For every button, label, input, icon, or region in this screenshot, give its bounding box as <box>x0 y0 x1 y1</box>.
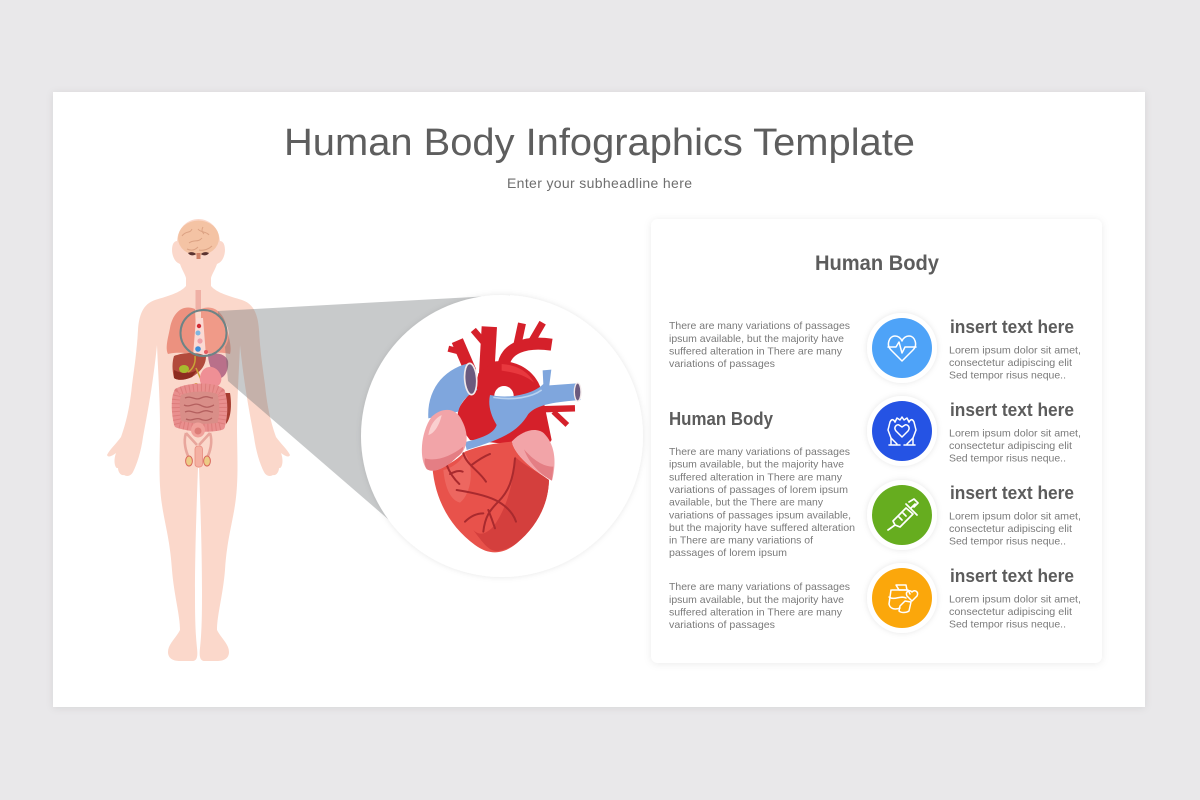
left paragraph middle: in There are many variations of <box>669 536 813 547</box>
left paragraph middle <box>669 447 855 559</box>
slide card <box>53 92 1145 707</box>
left paragraph top: ipsum available, but the majority have <box>669 334 844 345</box>
ventricles <box>432 442 549 552</box>
left paragraph middle: available, but the There are many <box>669 498 824 509</box>
left paragraph bottom: There are many variations of passages <box>669 582 850 593</box>
item 3: syringe <box>867 480 1081 550</box>
left paragraph middle: suffered alteration in There are many <box>669 472 843 483</box>
aortic arch opening <box>494 386 514 405</box>
reproductive organs <box>185 422 211 467</box>
item 1: heart rate: consectetur adipiscing elit <box>949 358 1072 369</box>
item 2: caring hands <box>867 396 1081 466</box>
lungs <box>167 290 231 356</box>
left paragraph bottom: variations of passages <box>669 620 775 631</box>
panel heading: Human Body <box>815 252 939 275</box>
left paragraph middle: There are many variations of passages <box>669 447 850 458</box>
item 4: heart bottle <box>867 563 1081 633</box>
item 3: syringe: Lorem ipsum dolor sit amet, <box>949 512 1081 522</box>
liver and stomach <box>172 353 228 389</box>
heart illustration <box>422 323 581 552</box>
brain <box>178 220 219 259</box>
item 4: heart bottle: Lorem ipsum dolor sit amet, <box>949 594 1081 606</box>
icon: syringe <box>888 499 918 530</box>
left paragraph top <box>669 321 850 370</box>
left paragraph middle: variations of passages ipsum available, <box>669 510 851 521</box>
item 1: heart rate <box>867 313 1081 383</box>
vena cava <box>428 363 478 418</box>
item 4: heart bottle: consectetur adipiscing elit <box>949 607 1072 618</box>
left paragraph middle: but the majority have suffered alteration <box>669 523 855 534</box>
arteries <box>448 323 575 425</box>
body silhouette <box>107 219 290 661</box>
item 3: syringe: Sed tempor risus neque.. <box>949 536 1066 548</box>
zoom circle <box>361 295 643 577</box>
title: Human Body Infographics Template <box>284 122 915 164</box>
item 2: caring hands: Lorem ipsum dolor sit amet, <box>949 428 1081 440</box>
left heading: Human Body <box>669 409 773 429</box>
item 3: syringe: insert text here <box>950 483 1074 503</box>
left paragraph top: variations of passages <box>669 359 775 370</box>
info panel <box>651 219 1102 663</box>
left paragraph middle: ipsum available, but the majority have <box>669 460 844 471</box>
left paragraph top: There are many variations of passages <box>669 321 850 332</box>
left paragraph middle: passages of lorem ipsum <box>669 548 787 559</box>
human body figure <box>107 219 290 661</box>
item 1: heart rate: Lorem ipsum dolor sit amet, <box>949 346 1081 356</box>
pulmonary artery <box>465 370 581 450</box>
item 4: heart bottle: Sed tempor risus neque.. <box>949 620 1066 630</box>
left paragraph bottom: suffered alteration in There are many <box>669 608 843 618</box>
icon: hands holding heart <box>888 417 916 445</box>
left paragraph middle: variations of passages of lorem ipsum <box>669 485 848 496</box>
left paragraph top: suffered alteration in There are many <box>669 346 843 358</box>
item 1: heart rate: Sed tempor risus neque.. <box>949 370 1066 382</box>
item 2: caring hands: Sed tempor risus neque.. <box>949 454 1066 464</box>
magnifier projection beam <box>218 295 510 560</box>
icon: medicine and heart <box>889 585 918 612</box>
subtitle: Enter your subheadline here <box>507 175 692 191</box>
left paragraph bottom: ipsum available, but the majority have <box>669 595 844 606</box>
atria <box>422 410 555 481</box>
item 2: caring hands: insert text here <box>950 400 1074 420</box>
intestines <box>176 388 231 428</box>
item 3: syringe: consectetur adipiscing elit <box>949 524 1072 535</box>
left paragraph bottom <box>669 582 850 631</box>
item 4: heart bottle: insert text here <box>950 566 1074 586</box>
item 2: caring hands: consectetur adipiscing elit <box>949 441 1072 452</box>
magnifier ring on chest <box>180 310 226 356</box>
icon: heartbeat <box>888 336 916 361</box>
item 1: heart rate: insert text here <box>950 317 1074 337</box>
